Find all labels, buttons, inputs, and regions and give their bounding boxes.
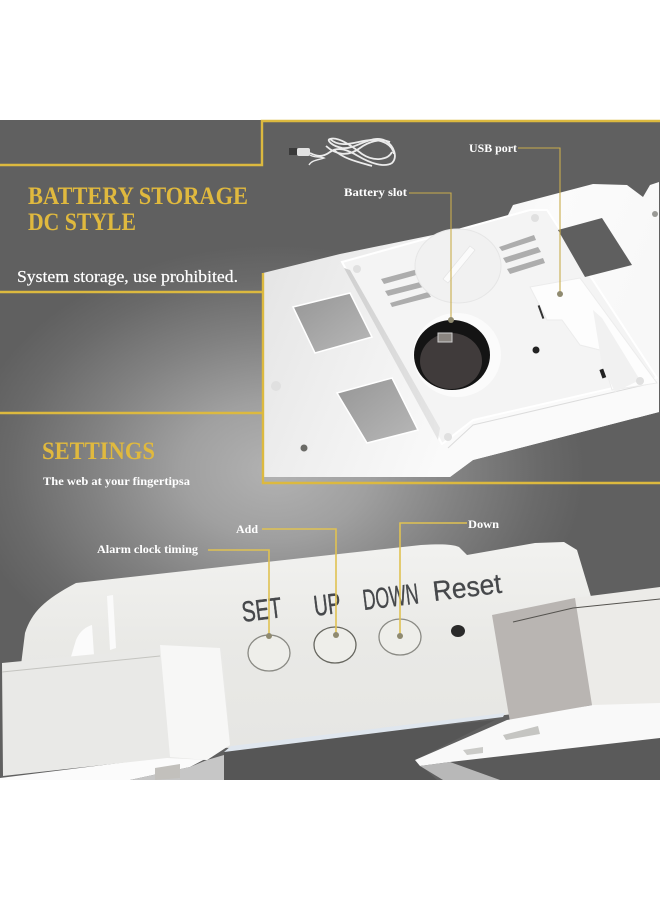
stand pocket — [155, 764, 180, 780]
button: DOWN — [379, 619, 421, 655]
button: UP — [314, 627, 356, 663]
right block top face — [574, 587, 660, 707]
vents left — [381, 269, 431, 307]
raised centre plate — [342, 210, 657, 444]
back of clock: battery storage photo — [263, 182, 659, 477]
battery well — [413, 313, 501, 397]
label: SET: SET — [240, 592, 284, 629]
button: SET — [248, 635, 290, 671]
callout: down — [397, 517, 499, 639]
hinge — [593, 310, 640, 392]
lower left shadow area — [130, 755, 224, 780]
text: system storage note: System storage, use prohibited. — [17, 267, 238, 286]
device back housing — [263, 182, 659, 477]
callout: USB port — [469, 141, 563, 297]
plate shaded side — [344, 268, 440, 440]
battery cover disc — [415, 229, 501, 303]
label: Reset: Reset — [431, 568, 503, 607]
text: settings subtitle: The web at your fingertipsa — [43, 474, 190, 488]
stand pocket upper — [503, 726, 540, 740]
right dark area — [450, 738, 660, 780]
reset hole — [451, 625, 465, 637]
screw posts — [271, 214, 644, 441]
left white block — [2, 648, 230, 776]
bottom left stand — [0, 757, 207, 780]
right grey block face — [492, 598, 592, 722]
side loop — [70, 625, 94, 660]
heading: settings: SETTINGS — [42, 438, 155, 465]
callout: battery slot — [344, 185, 454, 323]
window: lower sensor — [337, 378, 418, 443]
heading: battery storage: BATTERY STORAGE — [28, 183, 248, 210]
dark gap under clock — [224, 720, 495, 780]
callout: add: Add — [236, 522, 258, 536]
screws — [300, 444, 308, 452]
right bottom stand — [415, 703, 660, 766]
USB cable illustration — [289, 138, 395, 166]
label: DOWN: DOWN — [361, 578, 420, 617]
cover slot — [443, 246, 475, 283]
heading: battery storage — [28, 183, 248, 236]
gold frame lines — [0, 121, 660, 483]
coin battery — [420, 333, 482, 389]
vents right — [499, 235, 545, 274]
lower right stand reflection — [420, 762, 500, 780]
label: UP: UP — [312, 588, 343, 623]
front edge of clock: buttons photo — [0, 542, 660, 780]
blue-white body underside strip — [224, 713, 505, 752]
callout: battery slot: Battery slot — [344, 185, 407, 199]
lower rim — [428, 378, 659, 477]
stand pocket lower — [463, 747, 483, 755]
callout: alarm clock timing — [97, 542, 272, 639]
gray background panel — [0, 120, 660, 780]
USB compartment — [530, 278, 657, 390]
window: dark sensor — [558, 218, 632, 277]
body inset panel edge — [107, 595, 116, 650]
callout: add — [236, 522, 339, 638]
callout: down: Down — [468, 517, 499, 531]
clock main body — [20, 542, 592, 748]
callout: USB port: USB port — [469, 141, 517, 155]
heading: battery storage: DC STYLE — [28, 209, 136, 236]
reset hole — [532, 346, 540, 354]
callout: alarm clock timing: Alarm clock timing — [97, 542, 198, 556]
window: upper sensor — [293, 293, 372, 353]
